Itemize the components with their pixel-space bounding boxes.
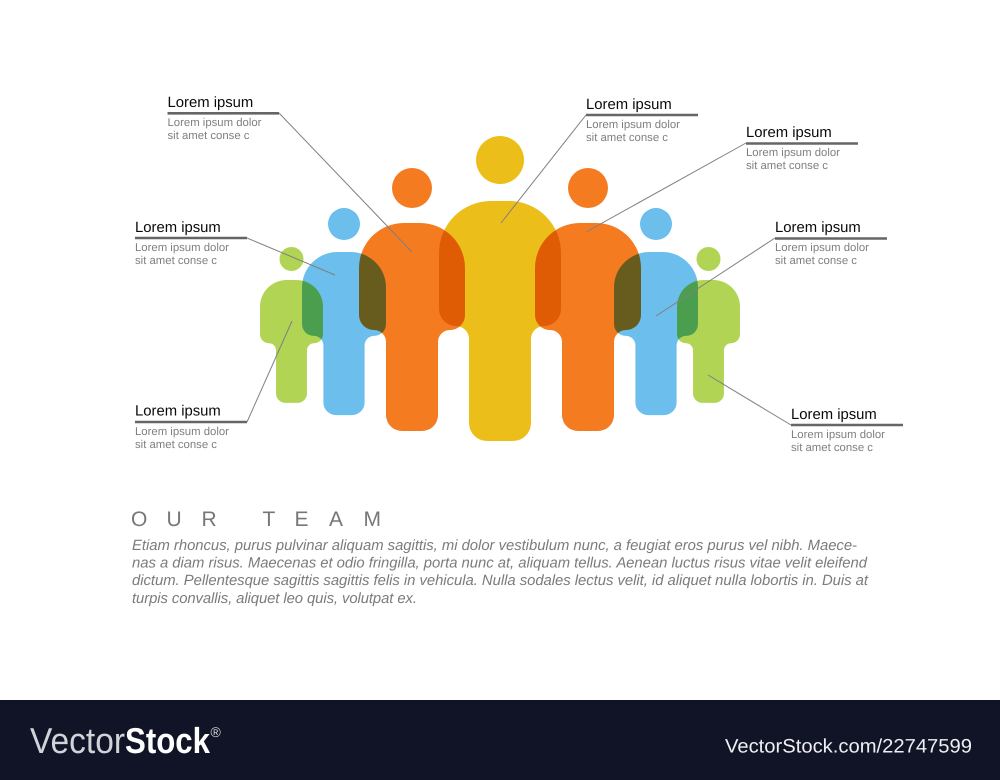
callout: top left: sit amet conse c: [168, 130, 250, 142]
callout: middle right: Lorem ipsum dolor: [775, 242, 869, 254]
footer logo: VectorStock: Vector: [30, 720, 125, 761]
callout: upper right: Lorem ipsum: [746, 125, 832, 141]
footer logo: VectorStock: [30, 720, 222, 761]
body paragraph: turpis convallis, aliquet leo quis, volutpat ex.: [132, 591, 417, 607]
person: left orange: [359, 168, 465, 431]
callout: top centre: Lorem ipsum dolor: [586, 119, 680, 131]
callout: top centre: sit amet conse c: [586, 132, 668, 144]
callout: middle left: Lorem ipsum: [135, 220, 221, 236]
body paragraph: dictum. Pellentesque sagittis sagittis felis in vehicula. Nulla sodales lectus velit, id aliquet nulla lobortis in. Duis at: [132, 573, 869, 589]
footer logo: VectorStock: ®: [210, 724, 222, 740]
callout: bottom right: Lorem ipsum: [791, 407, 877, 423]
team figures illustration: [260, 136, 740, 441]
person: centre yellow: [439, 136, 561, 441]
person: left blue: [302, 208, 386, 415]
person: right orange: [535, 168, 641, 431]
callout: bottom left: Lorem ipsum: [135, 404, 221, 420]
callout: upper right: Lorem ipsum dolor: [746, 147, 840, 159]
footer logo: VectorStock: Stock: [125, 720, 211, 761]
callout: upper right: sit amet conse c: [746, 160, 828, 172]
callout: bottom right: Lorem ipsum dolor: [791, 429, 885, 441]
person: right blue: [614, 208, 698, 415]
callout: top left: Lorem ipsum: [168, 95, 253, 111]
callout: middle left: [135, 220, 335, 275]
person: left green: [260, 247, 323, 403]
footer image id: VectorStock.com/22747599: [725, 736, 972, 758]
callout: middle right: [656, 220, 887, 316]
callout: bottom right: sit amet conse c: [791, 442, 873, 454]
body paragraph: Etiam rhoncus, purus pulvinar aliquam sagittis, mi dolor vestibulum nunc, a feugiat eros purus vel nibh. Maece-: [132, 538, 857, 554]
callout: middle right: sit amet conse c: [775, 255, 857, 267]
callout: top centre: [501, 97, 698, 223]
person: right green: [677, 247, 740, 403]
callout: bottom right: [708, 375, 903, 454]
callout: top left: Lorem ipsum dolor: [168, 117, 262, 129]
callout: top centre: Lorem ipsum: [586, 97, 672, 113]
body paragraph: [132, 538, 869, 607]
callout: middle left: sit amet conse c: [135, 255, 217, 267]
callout: middle right: Lorem ipsum: [775, 220, 861, 236]
callout: upper right: [586, 125, 858, 232]
footer band: [0, 700, 1000, 780]
callout: middle left: Lorem ipsum dolor: [135, 242, 229, 254]
body paragraph: nas a diam risus. Maecenas et odio fringilla, porta nunc at, aliquam tellus. Aenean luctus risus vitae velit eleifend: [132, 556, 868, 572]
heading: our team: OUR TEAM: [131, 508, 381, 531]
callout: bottom left: Lorem ipsum dolor: [135, 426, 229, 438]
callout: bottom left: sit amet conse c: [135, 439, 217, 451]
callout: bottom left: [135, 321, 292, 451]
callout: top left: [168, 95, 412, 252]
